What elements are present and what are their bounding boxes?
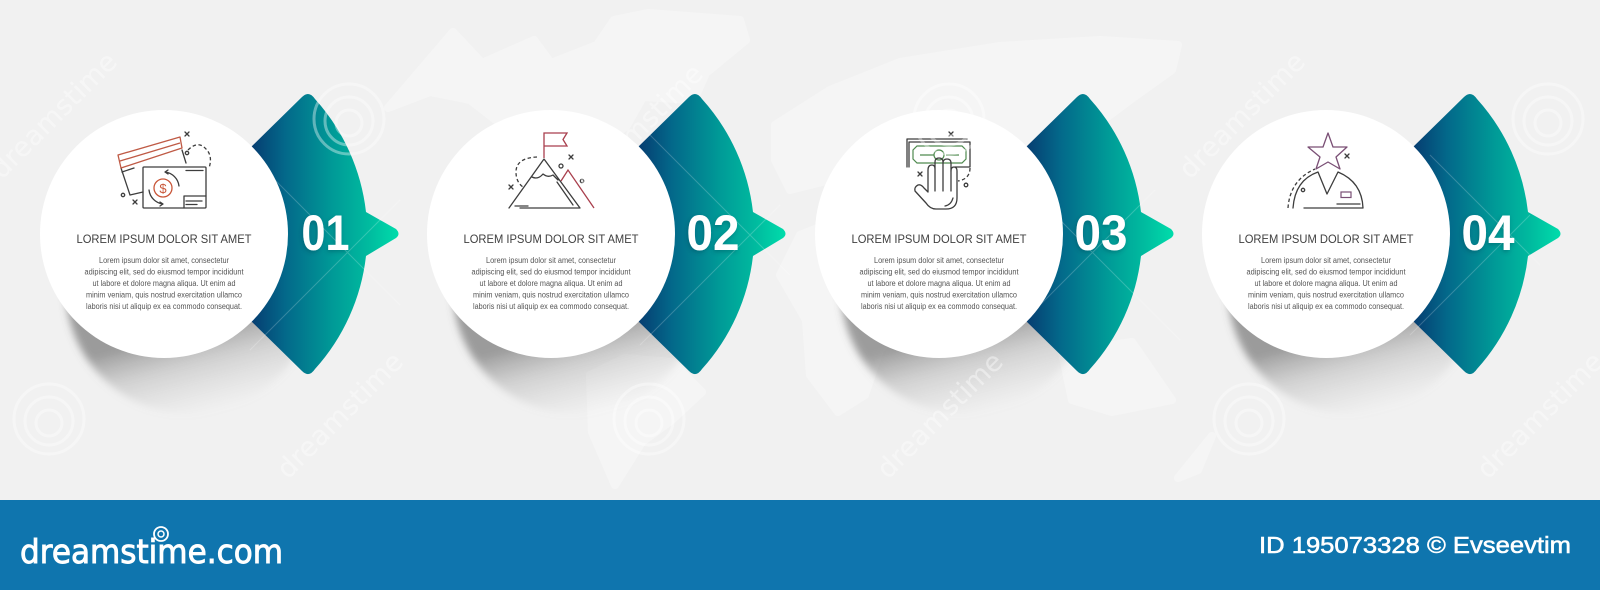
- step 4 arrow: [1412, 94, 1560, 374]
- step 1: [40, 94, 398, 414]
- step 2 shadow: [453, 166, 701, 414]
- step 4 body: [1246, 256, 1406, 311]
- step 1 heading: LOREM IPSUM DOLOR SIT AMET: [76, 232, 252, 246]
- step 1 body: ut labore et dolore magna aliqua. Ut enim ad: [92, 279, 236, 288]
- step 1 circle: [40, 110, 288, 358]
- world map: [388, 13, 1212, 485]
- step 2 body: laboris nisi ut aliquip ex ea commodo consequat.: [473, 302, 629, 311]
- step 4 number: 04: [1462, 205, 1515, 261]
- step 4 body: adipiscing elit, sed do eiusmod tempor incididunt: [1246, 268, 1406, 276]
- step 4 circle: [1202, 110, 1450, 358]
- icon: credit cards and dollar: [118, 132, 210, 208]
- step 3 shadow: [841, 166, 1089, 414]
- step 1 body: Lorem ipsum dolor sit amet, consectetur: [99, 256, 229, 265]
- step 2 body: minim veniam, quis nostrud exercitation ullamco: [473, 290, 630, 300]
- step 1 body: adipiscing elit, sed do eiusmod tempor incididunt: [84, 268, 244, 276]
- step 2 body: Lorem ipsum dolor sit amet, consectetur: [486, 256, 616, 265]
- footer logo: dreamstime.com: [20, 532, 283, 571]
- icon: credit cards and dollar: $: [159, 181, 167, 196]
- step 2 body: [472, 256, 631, 311]
- watermark overlay: dreamstime: [271, 346, 410, 485]
- step 1 number: 01: [302, 205, 350, 261]
- step 1 body: [84, 256, 244, 311]
- step 3 body: ut labore et dolore magna aliqua. Ut enim ad: [868, 279, 1010, 288]
- icon: star over person: [1288, 133, 1363, 208]
- step 1 body: minim veniam, quis nostrud exercitation ullamco: [86, 290, 243, 300]
- watermark overlay: dreamstime: [1173, 46, 1312, 185]
- step 4 shadow: [1228, 166, 1476, 414]
- step 2 body: adipiscing elit, sed do eiusmod tempor incididunt: [472, 268, 631, 276]
- icon: hand on banknote: [907, 132, 970, 209]
- watermark overlay: dreamstime: [571, 58, 710, 197]
- icon: mountain with flag: [509, 133, 594, 208]
- footer credit: ID 195073328 © Evseevtim: [1259, 532, 1571, 558]
- step 3 heading: LOREM IPSUM DOLOR SIT AMET: [852, 232, 1027, 246]
- watermark overlay: [0, 46, 1600, 485]
- step 3 body: laboris nisi ut aliquip ex ea commodo consequat.: [861, 302, 1017, 311]
- step 3 body: Lorem ipsum dolor sit amet, consectetur: [874, 256, 1004, 265]
- step 2 heading: LOREM IPSUM DOLOR SIT AMET: [464, 232, 639, 246]
- step 4 heading: LOREM IPSUM DOLOR SIT AMET: [1238, 232, 1414, 246]
- step 3: [815, 94, 1174, 414]
- step 1 body: laboris nisi ut aliquip ex ea commodo consequat.: [86, 302, 242, 311]
- step 2 arrow: [637, 94, 786, 374]
- step 3 body: minim veniam, quis nostrud exercitation ullamco: [861, 290, 1018, 300]
- step 2 body: ut labore et dolore magna aliqua. Ut enim ad: [480, 279, 622, 288]
- step 2 number: 02: [686, 205, 740, 261]
- step 2 circle: [427, 110, 675, 358]
- step 3 arrow: [1025, 94, 1174, 374]
- step 3 body: [860, 256, 1019, 311]
- footer banner: [0, 500, 1600, 590]
- step 3 number: 03: [1074, 205, 1128, 261]
- step 4 body: ut labore et dolore magna aliqua. Ut enim ad: [1254, 279, 1398, 288]
- step 4: [1202, 94, 1560, 414]
- step 1 arrow: [250, 94, 398, 374]
- step 3 circle: [815, 110, 1063, 358]
- step 4 body: Lorem ipsum dolor sit amet, consectetur: [1261, 256, 1391, 265]
- step 4 body: minim veniam, quis nostrud exercitation ullamco: [1248, 290, 1405, 300]
- step 1 shadow: [66, 166, 314, 414]
- watermark overlay: dreamstime: [871, 346, 1010, 485]
- step 4 body: laboris nisi ut aliquip ex ea commodo consequat.: [1248, 302, 1404, 311]
- step 3 body: adipiscing elit, sed do eiusmod tempor incididunt: [860, 268, 1019, 276]
- step 2: [427, 94, 786, 414]
